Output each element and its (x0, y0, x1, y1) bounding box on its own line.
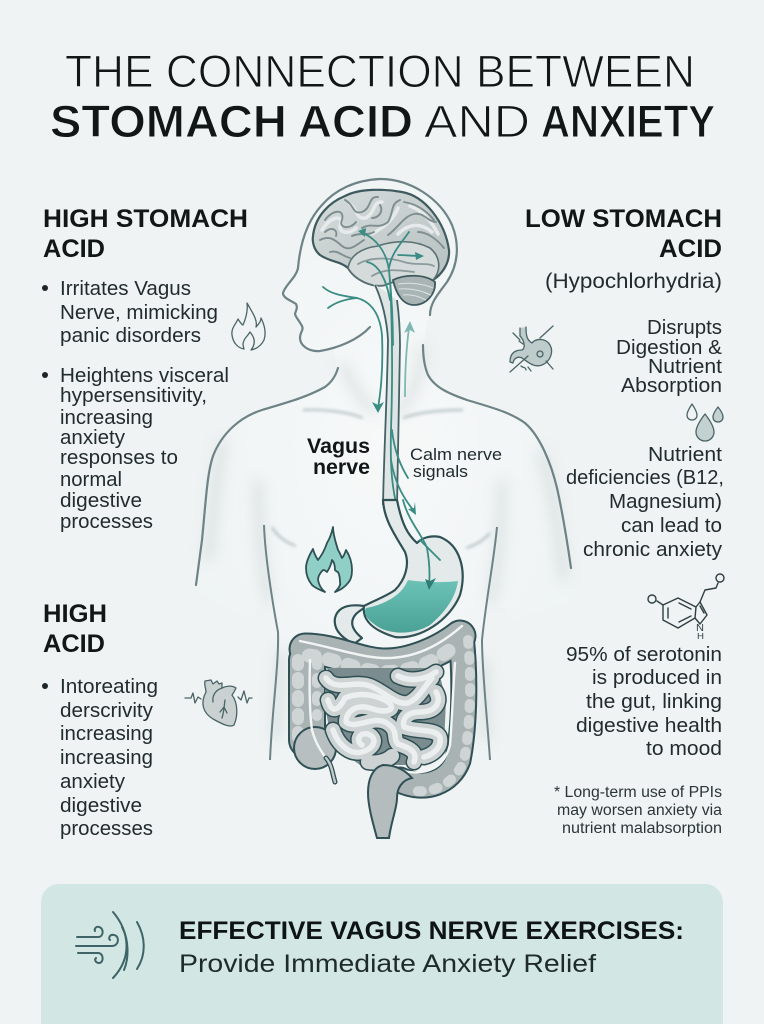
temporal lobe (348, 242, 439, 286)
text: nutrient deficiencies: Nutrient (648, 444, 722, 466)
subheading: (Hypochlorhydria) (545, 270, 722, 293)
brain stem and esophageal column (373, 283, 400, 505)
brain branches (361, 232, 393, 345)
up arrow (405, 328, 409, 397)
icon: water drops (687, 404, 723, 441)
text: nutrient deficiencies: deficiencies (B12, (566, 467, 724, 489)
icon: damaged stomach (510, 326, 553, 372)
duodenum (335, 605, 364, 644)
bullet: irritates vagus nerve: Nerve, mimicking (60, 302, 218, 324)
heading: ACID (43, 630, 105, 658)
neck and shoulders outline (423, 345, 571, 568)
collar and chest creases (272, 410, 490, 548)
body illustration (195, 179, 575, 760)
heading (525, 205, 722, 263)
heading: HIGH STOMACH (43, 205, 248, 233)
bullet list (42, 676, 158, 840)
stomach (364, 500, 463, 637)
bullet list: increasing (60, 723, 153, 745)
panel: high stomach acid (42, 205, 248, 533)
main nerve (390, 280, 400, 520)
text: serotonin: 95% of serotonin (566, 644, 722, 666)
title: THE CONNECTION BETWEEN (65, 46, 695, 97)
down arrow (372, 402, 384, 413)
text: disrupts digestion: Nutrient (648, 356, 722, 378)
bullet: visceral hypersensitivity: digestive (60, 490, 142, 512)
footnote: may worsen anxiety via (557, 802, 722, 819)
label: calm nerve signals: Calm nerve (410, 445, 502, 464)
text: disrupts digestion: Digestion & (616, 337, 723, 359)
panel: low stomach acid (525, 205, 724, 837)
bullet list: anxiety (60, 771, 125, 793)
cecum (294, 727, 336, 769)
bullet: irritates vagus nerve: panic disorders (60, 325, 201, 347)
stomach arrowhead (425, 578, 436, 590)
bullet: visceral hypersensitivity (42, 365, 229, 533)
banner text: EFFECTIVE VAGUS NERVE EXERCISES: (179, 917, 684, 945)
brain gyri highlights (322, 202, 438, 234)
icon: outline flame (232, 303, 265, 350)
heading (43, 600, 107, 658)
text: disrupts digestion: Disrupts (647, 317, 722, 339)
bullet: visceral hypersensitivity: hypersensitivity, (60, 385, 207, 407)
heading: ACID (659, 235, 722, 263)
title: STOMACH ACID (50, 96, 413, 147)
vagus nerve lines (323, 228, 424, 520)
torso sides (264, 525, 278, 760)
heading: ACID (43, 235, 105, 263)
text: serotonin: digestive health (576, 715, 722, 737)
colon (294, 626, 470, 791)
colon outline (305, 636, 464, 785)
heading: LOW STOMACH (525, 205, 722, 233)
bullet: visceral hypersensitivity: anxiety (60, 427, 125, 449)
label: vagus nerve: nerve (313, 456, 370, 479)
colon white band (300, 626, 462, 772)
bullet: visceral hypersensitivity: normal (60, 469, 122, 491)
appendix (326, 758, 335, 782)
cerebellum (393, 276, 435, 305)
banner text (179, 917, 684, 978)
label: vagus nerve (307, 435, 370, 479)
right torso side (482, 527, 497, 760)
text: serotonin (566, 644, 722, 760)
bullet: irritates vagus nerve (42, 278, 218, 347)
body silhouette (195, 180, 575, 760)
temporal folds (358, 258, 434, 276)
label: vagus nerve: Vagus (307, 435, 370, 458)
small intestine (324, 668, 446, 765)
bullet list: increasing (60, 747, 153, 769)
title: ANXIETY (541, 96, 715, 147)
icon: heart with pulse (185, 680, 252, 726)
bullet list: Intoreating (60, 676, 158, 698)
text: serotonin: is produced in (592, 667, 722, 689)
colon body (305, 636, 464, 785)
heading (43, 205, 248, 263)
text: nutrient deficiencies: can lead to (621, 515, 722, 537)
soft body shading (208, 345, 564, 740)
bullet list: digestive (60, 795, 142, 817)
left shoulder outline (196, 368, 338, 585)
icon: serotonin molecule: N (696, 623, 704, 634)
brain (313, 190, 449, 305)
text: disrupts digestion (616, 317, 723, 397)
bullet: irritates vagus nerve: Irritates Vagus (60, 278, 191, 300)
bullet list: processes (60, 818, 153, 840)
heading: HIGH (43, 600, 107, 628)
footnote (554, 784, 722, 837)
bullet list: derscrivity (60, 700, 153, 722)
rectum (368, 765, 412, 838)
text: nutrient deficiencies: chronic anxiety (583, 539, 722, 561)
icon: serotonin molecule (648, 574, 724, 641)
text: disrupts digestion: Absorption (621, 375, 722, 397)
stomach acid (365, 580, 458, 633)
text: nutrient deficiencies: Magnesium) (609, 491, 722, 513)
icon: serotonin molecule: H (697, 632, 704, 641)
teal flame icon (306, 527, 352, 592)
bullet: visceral hypersensitivity: increasing (60, 407, 153, 429)
descending face branch (323, 287, 382, 408)
bullet: visceral hypersensitivity: responses to (60, 447, 178, 469)
label: calm nerve signals (410, 445, 502, 481)
bullet: visceral hypersensitivity: Heightens visceral (60, 365, 229, 387)
panel: effective vagus nerve exercises (41, 884, 723, 1024)
icon: breath and vibration waves (76, 912, 144, 978)
bullet: visceral hypersensitivity: processes (60, 511, 153, 533)
cerebellum stripes (398, 283, 433, 300)
title (50, 46, 715, 147)
brain folds (320, 197, 444, 258)
footnote: nutrient malabsorption (562, 820, 722, 837)
label: calm nerve signals: signals (413, 462, 468, 481)
chest nerves (391, 430, 414, 511)
footnote: * Long-term use of PPIs (554, 784, 722, 801)
head and face outline (283, 179, 457, 351)
haustra lumps (298, 640, 470, 791)
panel: high acid (42, 600, 158, 840)
stomach nerve entry (403, 500, 430, 585)
banner text: Provide Immediate Anxiety Relief (179, 950, 596, 978)
text: nutrient deficiencies (566, 444, 724, 561)
title: AND (424, 96, 530, 147)
text: serotonin: to mood (646, 738, 722, 760)
text: serotonin: the gut, linking (586, 691, 722, 713)
brain arrowheads (358, 228, 424, 260)
